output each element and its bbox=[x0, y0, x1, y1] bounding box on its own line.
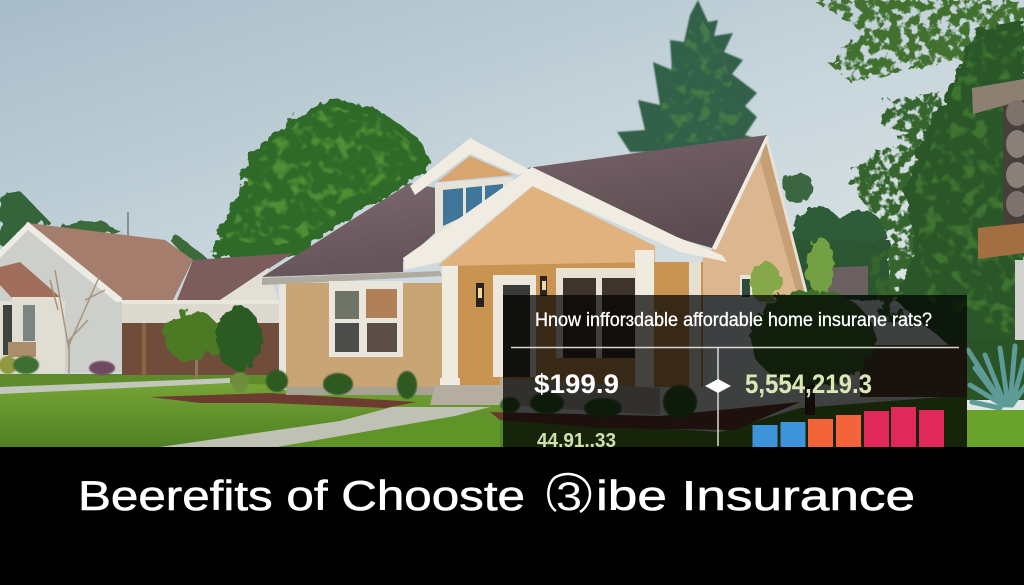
statistic: lower left value: 44.91,.33 bbox=[537, 430, 616, 452]
house: front door bbox=[493, 275, 536, 377]
tree: tall pine behind house bbox=[617, 0, 760, 152]
house: right gable wall bbox=[700, 155, 803, 296]
statistic: left price: $199.9 bbox=[534, 369, 619, 399]
front walkway bbox=[160, 407, 490, 447]
house: porch gable siding bbox=[438, 186, 655, 266]
house: foundation bbox=[286, 387, 436, 395]
bare young tree bbox=[50, 270, 105, 375]
front lawn bbox=[0, 383, 520, 447]
house: side wall bbox=[286, 283, 442, 387]
data panel overlay bbox=[503, 295, 967, 452]
icon: circled three logo bbox=[548, 474, 590, 519]
front shrubs bbox=[231, 370, 417, 399]
agave plant bbox=[968, 346, 1024, 408]
mulch bed bbox=[150, 393, 417, 408]
dark foliage behind agave bbox=[967, 340, 1024, 400]
sky background bbox=[0, 0, 1024, 450]
house: porch window bbox=[556, 268, 636, 358]
neighbour house on left bbox=[0, 222, 293, 375]
house: main right roof bbox=[527, 135, 767, 248]
house: right trim post and small window bbox=[689, 262, 752, 392]
tree: background trees right of house bbox=[782, 172, 890, 300]
bottom black band bbox=[0, 447, 1024, 585]
title: ibe Insurance bbox=[596, 472, 915, 519]
tree: large leafy tree on right bbox=[813, 0, 1024, 346]
house: right gable trim bbox=[712, 135, 808, 294]
house: corner trim bbox=[279, 284, 286, 390]
wooden post on right edge bbox=[972, 79, 1024, 344]
panel divider lines bbox=[511, 347, 959, 446]
house: porch gable white trim bbox=[403, 167, 727, 270]
neighbouring roof behind shrubs bbox=[815, 266, 868, 295]
small trees on left lawn bbox=[164, 306, 261, 395]
icon: diamond marker bbox=[705, 379, 731, 393]
tree: large green tree behind roof bbox=[212, 98, 432, 258]
tree: distant left trees bbox=[0, 193, 207, 262]
right lawn bbox=[967, 410, 1024, 448]
house: dormer bbox=[410, 138, 530, 236]
left sidewalk bbox=[0, 378, 230, 396]
lawn and mulch under panel bbox=[490, 395, 967, 447]
title bbox=[78, 472, 915, 519]
antenna bbox=[127, 212, 129, 236]
photo scene: house and garden bbox=[0, 0, 1024, 450]
shrubs in front of porch bbox=[500, 385, 697, 419]
house: eave trim bbox=[262, 271, 442, 285]
house: porch lamps bbox=[476, 276, 547, 307]
lawn right of walkway bbox=[277, 416, 540, 447]
bar chart bbox=[752, 407, 944, 448]
shrubs by neighbour house bbox=[0, 356, 115, 375]
house: left roof bbox=[262, 183, 436, 277]
house: porch columns bbox=[440, 250, 654, 390]
lawn: back strip bbox=[0, 374, 290, 394]
statistic: right value: 5,554,219.3 bbox=[745, 369, 872, 399]
icon: circled three logo: 3 bbox=[556, 475, 582, 519]
house: porch base and steps bbox=[430, 378, 660, 415]
house: side window bbox=[329, 281, 403, 357]
panel background bbox=[503, 295, 967, 448]
fence and garden tree bbox=[749, 237, 967, 415]
house: porch wall bbox=[458, 262, 703, 387]
title: Beerefits of Chooste bbox=[78, 472, 525, 519]
panel heading: Hnow infforɜdable affordable home insurane rats? bbox=[535, 310, 932, 331]
